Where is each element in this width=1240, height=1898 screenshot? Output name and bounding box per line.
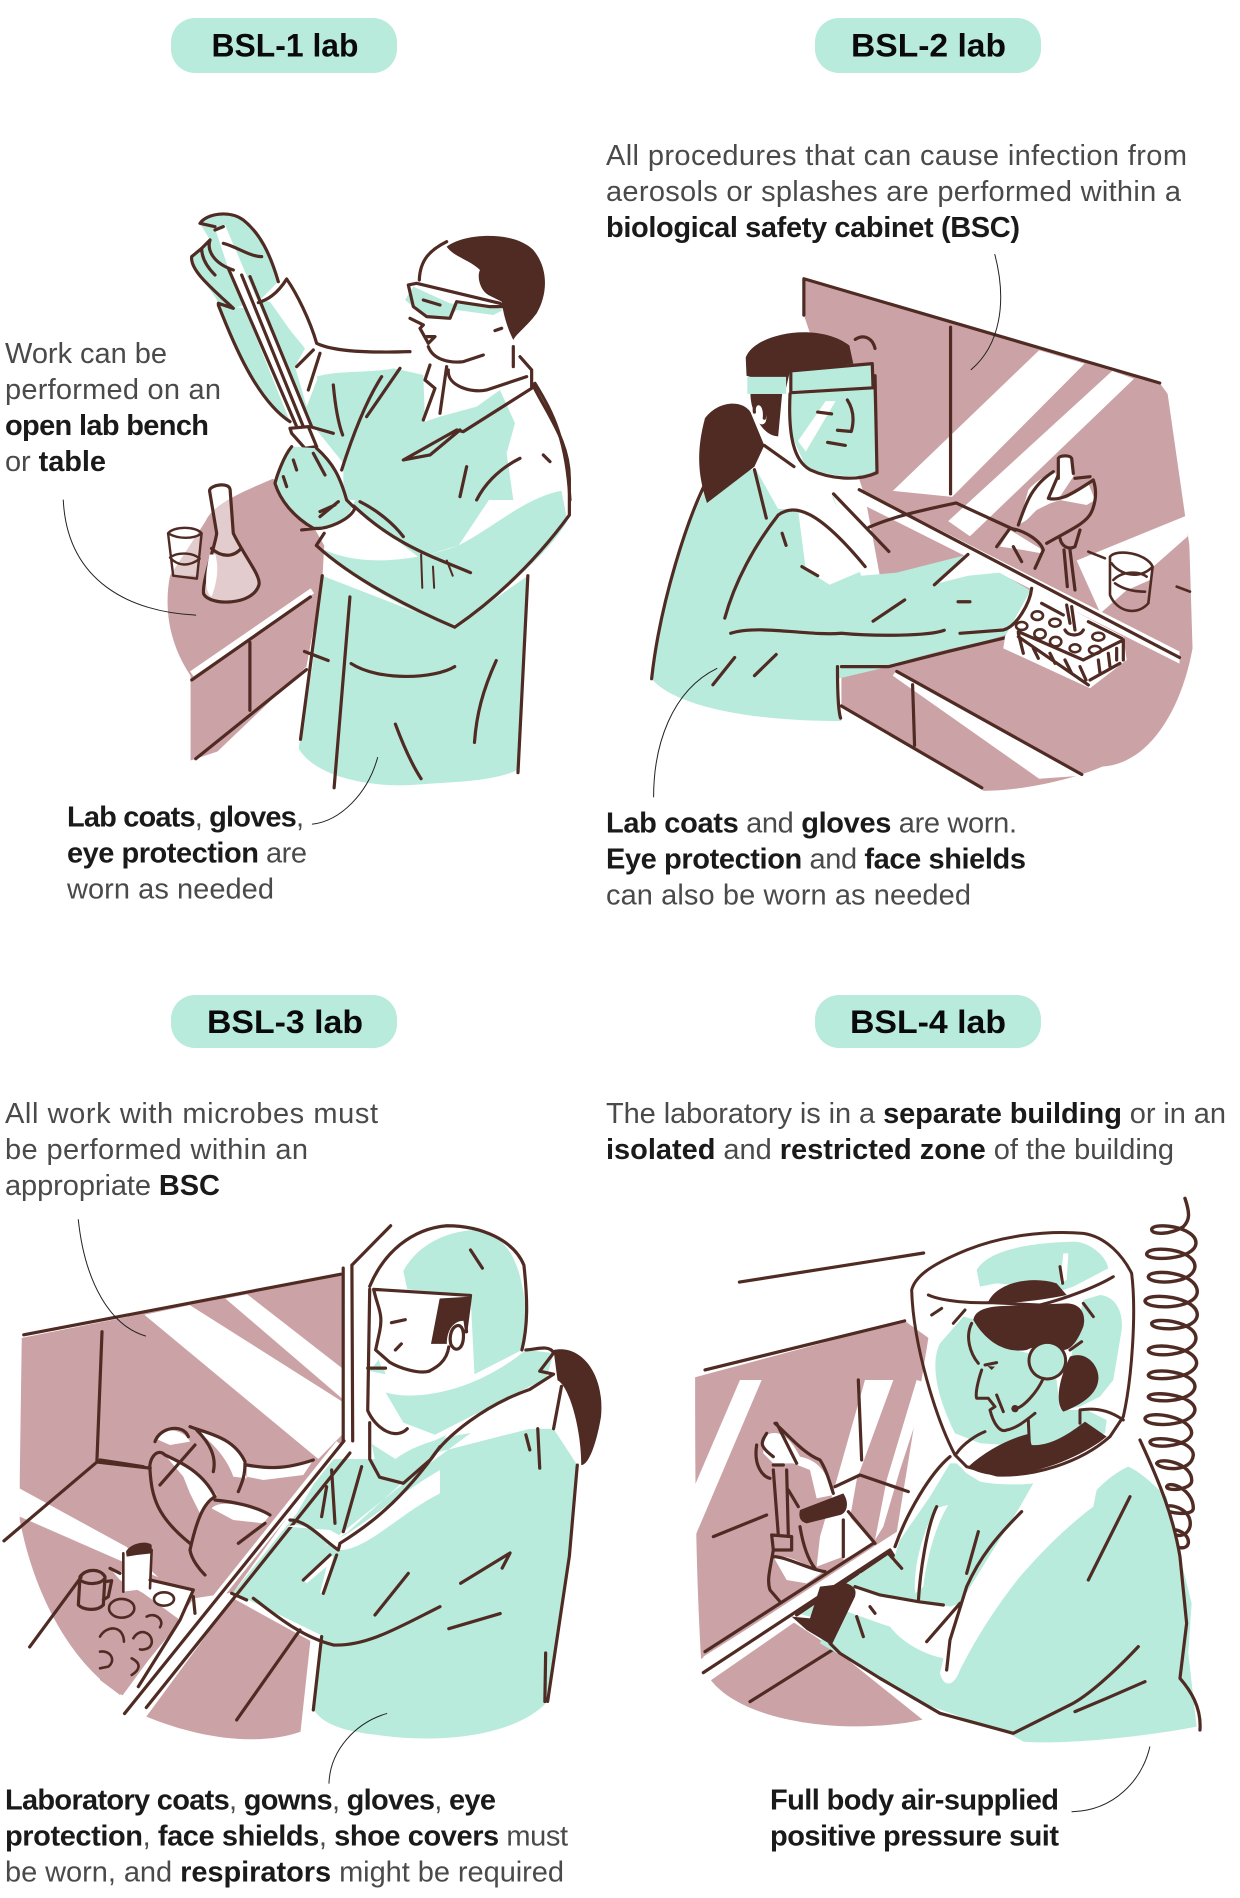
text: full body air-supplied positive pressure suit: Full body air-supplied xyxy=(770,1784,1059,1816)
heading: BSL-1 lab xyxy=(171,18,397,73)
text: procedures in biological safety cabinet: aerosols or splashes are performed within a xyxy=(606,176,1182,208)
text: work can be performed on open lab bench: or table xyxy=(5,446,106,478)
text: all work within an appropriate BSC: be performed within an xyxy=(5,1134,308,1166)
text: full body air-supplied positive pressure suit xyxy=(770,1784,1059,1852)
callout line: laboratory coats and gowns xyxy=(329,1714,387,1783)
text: laboratory coats, gowns, gloves, respirators: protection, face shields, shoe covers must xyxy=(5,1820,568,1852)
heading: BSL-2 lab xyxy=(815,18,1041,73)
text: laboratory coats, gowns, gloves, respirators: Laboratory coats, gowns, gloves, eye xyxy=(5,1784,496,1816)
heading: BSL-3 lab xyxy=(171,995,397,1048)
panel: BSL-1 lab xyxy=(5,18,570,906)
illustration: BSL-4 researcher in positive pressure suit xyxy=(690,1198,1200,1742)
callout line: open lab bench xyxy=(63,500,196,615)
text: separate building or isolated zone xyxy=(606,1098,1226,1166)
panel: BSL-3 lab xyxy=(4,995,601,1888)
text: all work within an appropriate BSC: All work with microbes must xyxy=(5,1098,378,1130)
text: lab coats, gloves, eye protection: worn as needed xyxy=(66,874,274,906)
text: lab coats, gloves, eye protection, face shields: Lab coats and gloves are worn. xyxy=(606,808,1017,840)
text: separate building or isolated zone: The laboratory is in a separate building or in an xyxy=(606,1098,1226,1130)
text: work can be performed on open lab bench: performed on an xyxy=(5,374,221,406)
callout line: lab coats xyxy=(312,758,378,824)
text: separate building or isolated zone: isolated and restricted zone of the building xyxy=(606,1134,1174,1166)
heading: BSL-4 lab: BSL-4 lab xyxy=(850,1004,1006,1040)
text: work can be performed on open lab bench: Work can be xyxy=(5,338,167,370)
heading: BSL-4 lab xyxy=(815,995,1041,1048)
heading: BSL-2 lab: BSL-2 lab xyxy=(851,28,1006,64)
heading: BSL-1 lab: BSL-1 lab xyxy=(212,28,358,64)
text: laboratory coats, gowns, gloves, respirators xyxy=(5,1784,568,1888)
panel: BSL-4 lab xyxy=(606,995,1226,1852)
illustration: BSL-3 researcher in hood and gown xyxy=(4,1226,601,1739)
text: lab coats, gloves, eye protection xyxy=(66,802,307,906)
text: work can be performed on open lab bench xyxy=(5,338,221,478)
text: lab coats, gloves, eye protection: eye protection are xyxy=(67,838,307,870)
icon: left beaker on tray xyxy=(78,1570,112,1609)
callout line: full body suit xyxy=(1072,1747,1150,1812)
callout line: biosafety cabinet xyxy=(78,1220,146,1336)
illustration: BSL-2 researcher at biological safety cabinet xyxy=(652,279,1193,791)
text: lab coats, gloves, eye protection: Lab coats, gloves, xyxy=(67,802,304,834)
panel: BSL-2 lab xyxy=(606,18,1193,912)
text: procedures in biological safety cabinet xyxy=(606,140,1187,244)
text: all work within an appropriate BSC xyxy=(5,1098,378,1202)
text: lab coats, gloves, eye protection, face shields: Eye protection and face shields xyxy=(606,844,1026,876)
text: procedures in biological safety cabinet: All procedures that can cause infection from xyxy=(606,140,1187,172)
text: lab coats, gloves, eye protection, face shields xyxy=(606,808,1026,912)
illustration: BSL-1 researcher with pipette at open bench xyxy=(168,214,570,788)
text: work can be performed on open lab bench: open lab bench xyxy=(5,410,209,442)
callout line: biological safety cabinet xyxy=(971,255,1001,370)
text: procedures in biological safety cabinet: biological safety cabinet (BSC) xyxy=(606,212,1020,244)
callout line: lab coats and gloves xyxy=(654,668,717,797)
text: lab coats, gloves, eye protection, face shields: can also be worn as needed xyxy=(606,880,971,912)
text: all work within an appropriate BSC: appropriate BSC xyxy=(5,1170,220,1202)
text: full body air-supplied positive pressure suit: positive pressure suit xyxy=(770,1820,1059,1852)
heading: BSL-3 lab: BSL-3 lab xyxy=(207,1004,363,1040)
text: laboratory coats, gowns, gloves, respirators: be worn, and respirators might be required xyxy=(5,1856,564,1888)
